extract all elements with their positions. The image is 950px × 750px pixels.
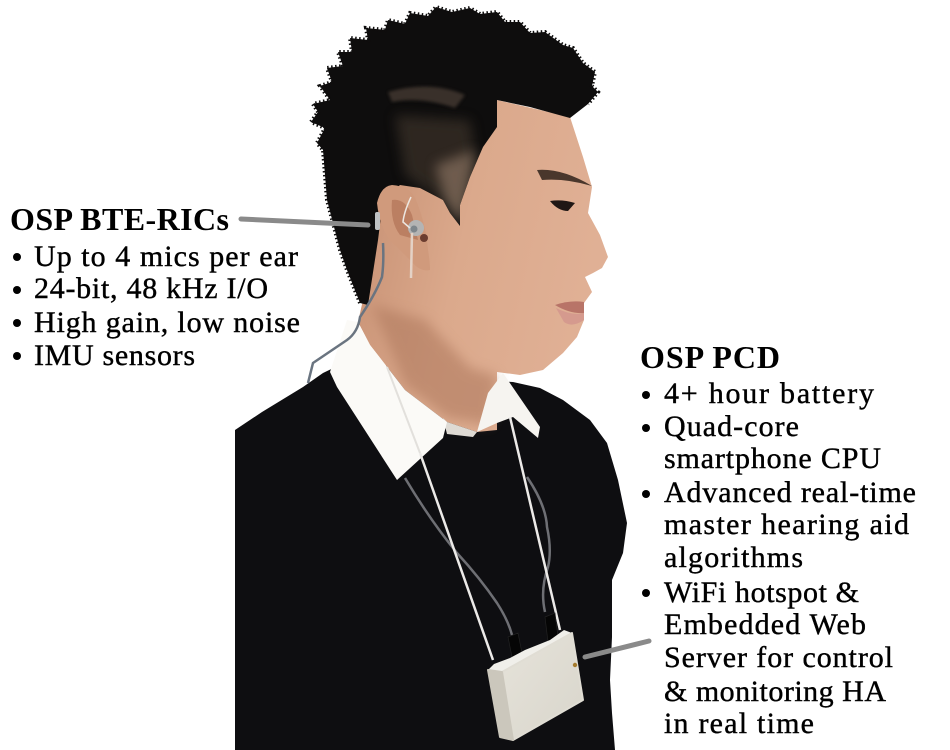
jaw and neck shadow	[372, 305, 497, 425]
grey cables to device	[405, 477, 550, 635]
bullet list	[642, 377, 916, 740]
pointer: BTE-RIC arrow	[241, 219, 368, 225]
left collar	[330, 320, 447, 480]
bullet list	[13, 240, 300, 372]
bullet list: Embedded Web	[664, 608, 866, 641]
bullet list: High gain, low noise	[34, 306, 300, 339]
bullet list: Advanced real-time	[664, 476, 916, 509]
heading: OSP BTE-RICs	[10, 201, 229, 237]
bullet list: Server for control	[664, 641, 893, 674]
bullet list: master hearing aid	[664, 508, 909, 541]
text block: OSP PCD	[640, 339, 916, 740]
right collar	[477, 373, 540, 438]
bullet list: in real time	[664, 707, 814, 740]
bullet list: IMU sensors	[34, 339, 195, 372]
bullet list: Quad-core	[664, 410, 799, 443]
sweater body	[235, 360, 627, 750]
bullet list: algorithms	[664, 541, 803, 574]
text block: OSP BTE-RICs	[10, 201, 300, 372]
hair	[311, 7, 598, 305]
heading: OSP PCD	[640, 339, 780, 375]
bullet list: Up to 4 mics per ear	[34, 240, 298, 273]
neck and face	[358, 100, 608, 432]
bullet list: 4+ hour battery	[664, 377, 874, 410]
black connectors	[508, 613, 558, 662]
bullet list: 24-bit, 48 kHz I/O	[34, 272, 268, 305]
bullet list: & monitoring HA	[664, 675, 886, 708]
grey cable from ear to neck	[308, 243, 383, 383]
bullet list: smartphone CPU	[664, 442, 881, 475]
photo: person wearing the devices	[235, 7, 627, 750]
eye and eyebrow	[537, 170, 592, 211]
lips	[555, 301, 584, 325]
ear	[377, 185, 430, 270]
bullet list: WiFi hotspot &	[664, 576, 859, 609]
inner shirt	[443, 418, 477, 437]
earpiece and wire	[375, 197, 424, 278]
white lanyards	[387, 367, 560, 660]
pointer: PCD arrow	[585, 641, 649, 657]
PCD device box	[488, 630, 583, 740]
hair highlights	[388, 87, 478, 225]
